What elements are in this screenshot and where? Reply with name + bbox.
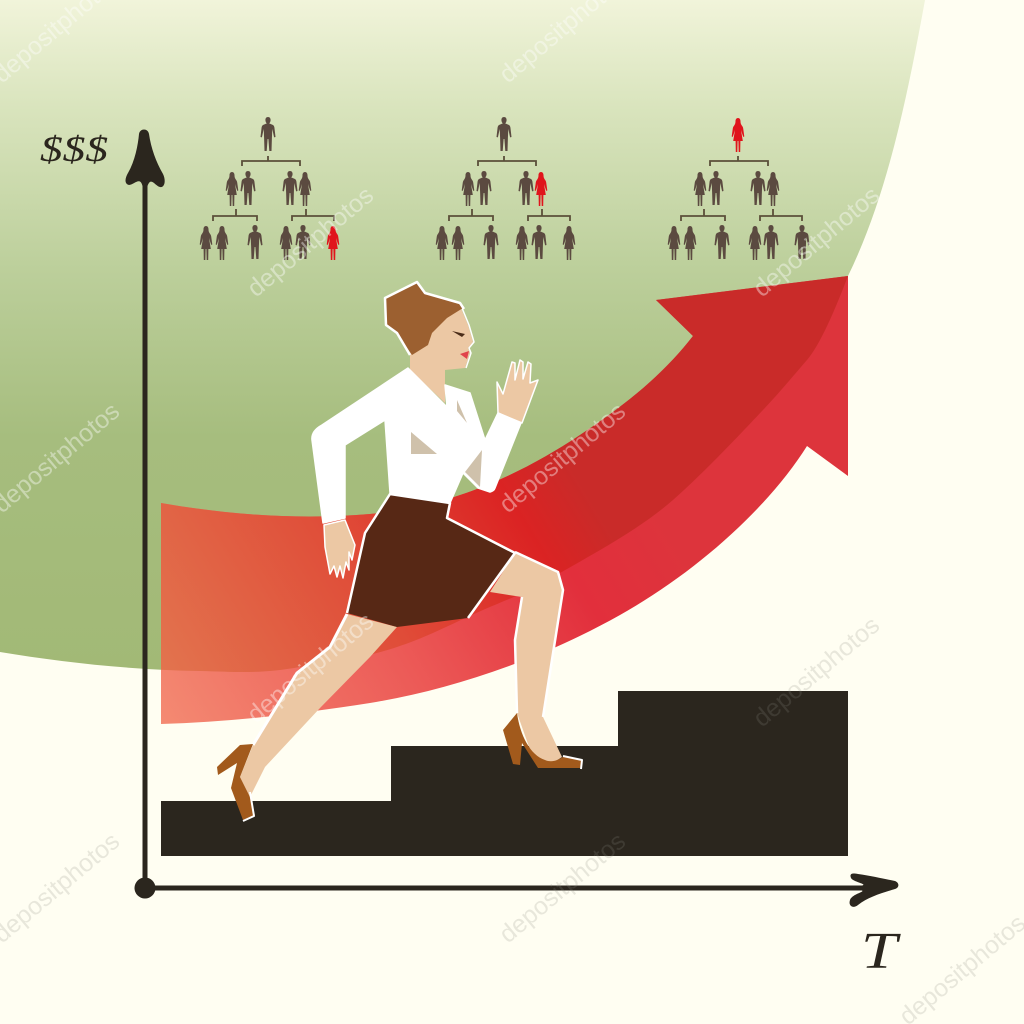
x axis label: T bbox=[861, 923, 901, 980]
pyramid 1 bbox=[200, 117, 339, 260]
lower hand bbox=[324, 520, 355, 578]
red growth arrow bbox=[161, 276, 848, 724]
watermarks: depositphotos bbox=[748, 181, 885, 303]
face outline bbox=[462, 308, 474, 368]
connectors 2 bbox=[449, 156, 570, 221]
green curved area bbox=[0, 0, 925, 672]
neck and face bbox=[410, 306, 473, 403]
horizontal axis with arrow bbox=[145, 873, 898, 907]
blouse shading bbox=[411, 400, 482, 487]
eye bbox=[452, 331, 465, 337]
vertical axis with arrow bbox=[126, 130, 165, 888]
watermarks: depositphotos bbox=[242, 607, 379, 729]
connectors 3 bbox=[681, 156, 802, 221]
raised hand bbox=[497, 360, 538, 423]
pyramid 3 bbox=[668, 118, 810, 260]
businesswoman running up the stairs bbox=[217, 282, 582, 821]
back shoe bbox=[217, 744, 255, 820]
front shoe bbox=[503, 713, 582, 768]
watermarks: depositphotos bbox=[748, 611, 885, 733]
stairs bbox=[161, 691, 848, 856]
watermarks: depositphotos bbox=[494, 397, 631, 519]
connectors 1 bbox=[213, 156, 334, 221]
y axis label: $$$ bbox=[40, 129, 108, 169]
watermarks: depositphotos bbox=[242, 181, 379, 303]
lips bbox=[460, 351, 469, 359]
blouse bbox=[312, 368, 521, 523]
pyramid 2 bbox=[436, 117, 575, 260]
skirt bbox=[347, 494, 515, 627]
front leg bbox=[490, 553, 563, 763]
watermarks: depositphotos bbox=[494, 827, 631, 949]
axis origin dot bbox=[134, 878, 156, 898]
back leg bbox=[240, 614, 397, 797]
hair bbox=[385, 282, 463, 355]
hair outline bbox=[385, 282, 464, 355]
